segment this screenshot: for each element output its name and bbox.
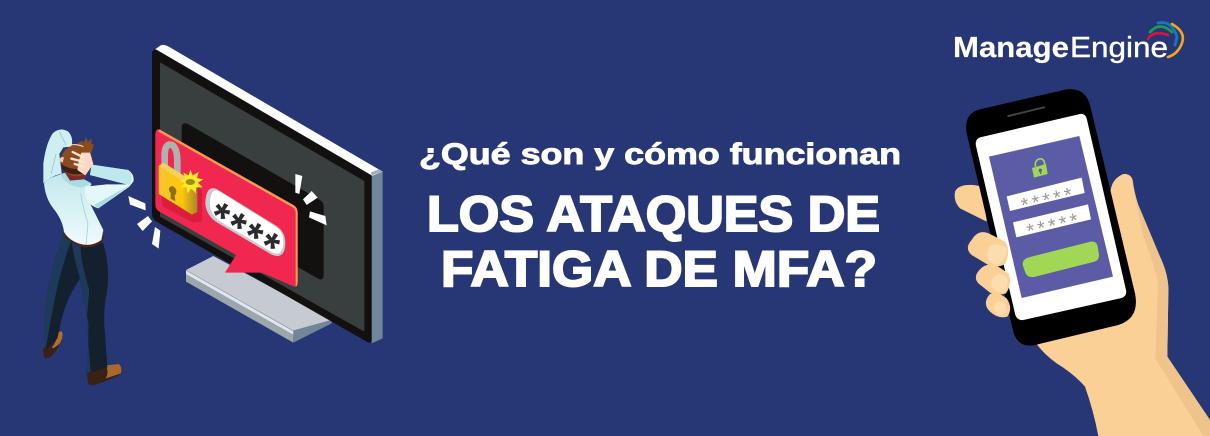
- logo: ManageEngine: [953, 23, 1183, 64]
- alert marks left: [128, 196, 160, 249]
- illustration: computer monitor with password alert: [152, 45, 383, 343]
- spark: [179, 169, 203, 193]
- title line two: FATIGA DE MFA?: [441, 241, 877, 297]
- login screen: [989, 136, 1113, 298]
- illustration: stressed man: [43, 130, 160, 385]
- password field: ****: [200, 192, 288, 271]
- logo arcs: [1148, 23, 1183, 57]
- monitor body: [152, 45, 383, 343]
- padlock: [159, 145, 203, 223]
- shirt: [43, 130, 134, 245]
- alert speech bubble: [155, 129, 298, 287]
- fingers: [968, 232, 1010, 317]
- password field one: [1007, 178, 1085, 217]
- password field one: *****: [1019, 184, 1075, 217]
- alert marks right: [295, 174, 327, 225]
- shoes: [43, 332, 122, 385]
- title line one: LOS ATAQUES DE: [427, 186, 880, 242]
- phone: [966, 89, 1136, 346]
- green button: [1023, 242, 1099, 277]
- head and hands: [59, 137, 94, 181]
- password field two: [1013, 204, 1091, 243]
- logo: ManageEngine: Manage: [953, 32, 1069, 64]
- trousers: [44, 232, 108, 373]
- monitor stand base: [186, 256, 332, 343]
- subtitle: ¿Qué son y cómo funcionan: [419, 138, 901, 171]
- hand behind phone: [955, 174, 1210, 436]
- password field two: *****: [1025, 210, 1081, 243]
- logo: ManageEngine: Engine: [1070, 32, 1168, 64]
- green lock icon: [1032, 159, 1048, 178]
- illustration: hand holding phone: [955, 89, 1210, 436]
